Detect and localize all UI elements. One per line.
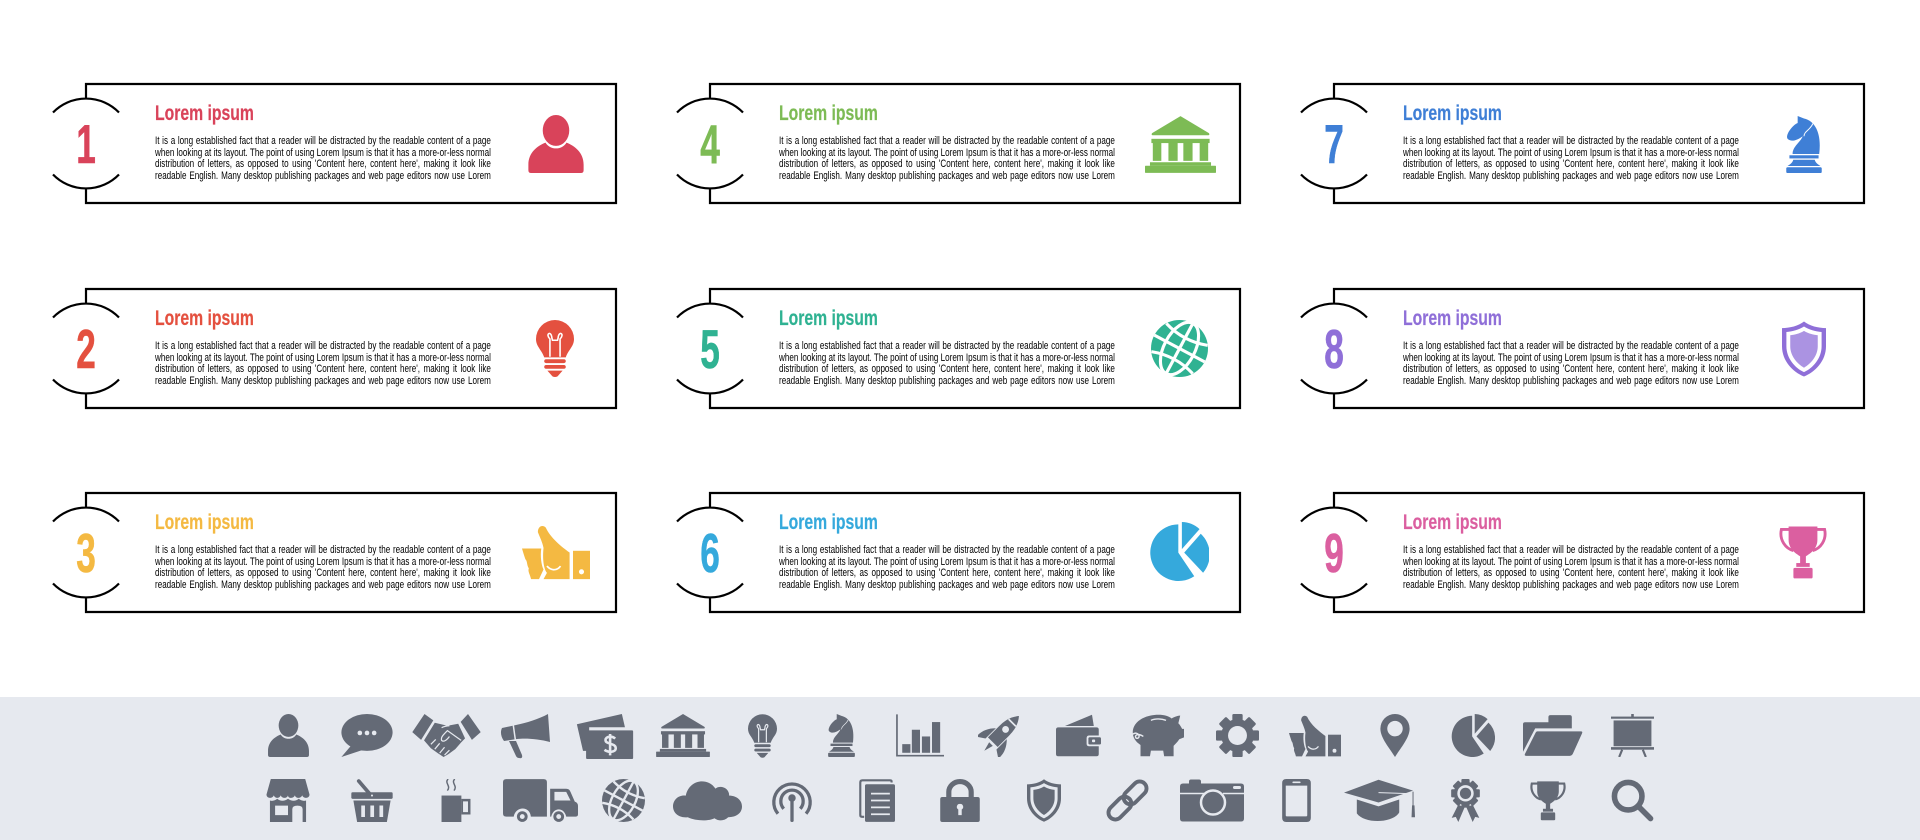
heading: Lorem ipsum: [155, 511, 254, 534]
body text: [779, 544, 1115, 591]
panel: card 4: [676, 82, 1242, 204]
number: 8: [1324, 318, 1344, 380]
frame and arcs: [52, 288, 618, 410]
body text: when looking at its layout. The point of using Lorem Ipsum is that it has a more-or-less normal: [779, 352, 1115, 364]
body text: [155, 135, 491, 182]
heading: Lorem ipsum: [155, 307, 254, 330]
icon: chess knight: [1786, 116, 1822, 173]
panel: card 1: [52, 82, 618, 204]
icon: mug: [441, 779, 471, 822]
panel: card 3: [52, 492, 618, 614]
body text: distribution of letters, as opposed to using 'Content here, content here', making it look like: [1403, 567, 1739, 579]
panel: card 6: [676, 492, 1242, 614]
icon: bar chart: [896, 714, 944, 757]
number: 3: [76, 522, 96, 584]
icon: light bulb: [536, 320, 574, 377]
panel: card 5: [676, 288, 1242, 410]
frame and arcs: [1300, 492, 1866, 614]
icon: magnifying glass: [1611, 779, 1654, 822]
icon: thumbs up: [522, 526, 590, 580]
body text: distribution of letters, as opposed to using 'Content here, content here', making it look like: [779, 567, 1115, 579]
body text: when looking at its layout. The point of using Lorem Ipsum is that it has a more-or-less normal: [779, 147, 1115, 159]
frame and arcs: [52, 492, 618, 614]
icon: rocket: [978, 714, 1021, 757]
body text: readable English. Many desktop publishing packages and web page editors now use Lorem: [1403, 170, 1739, 182]
body text: when looking at its layout. The point of using Lorem Ipsum is that it has a more-or-less normal: [155, 556, 491, 568]
body text: readable English. Many desktop publishing packages and web page editors now use Lorem: [1403, 579, 1739, 591]
icon: light bulb: [748, 714, 777, 758]
icon: chat: [341, 714, 393, 757]
icon: cloud: [673, 779, 742, 822]
body text: when looking at its layout. The point of using Lorem Ipsum is that it has a more-or-less normal: [1403, 352, 1739, 364]
frame and arcs: [676, 288, 1242, 410]
body text: distribution of letters, as opposed to using 'Content here, content here', making it look like: [155, 158, 491, 170]
icon: basket: [351, 779, 393, 822]
body text: distribution of letters, as opposed to using 'Content here, content here', making it look like: [1403, 363, 1739, 375]
icon: person: [268, 714, 309, 757]
body text: [155, 544, 491, 591]
number: 5: [700, 318, 720, 380]
frame and arcs: [1300, 82, 1866, 204]
icon: truck: [503, 779, 578, 822]
number: 7: [1324, 113, 1344, 175]
icon: wallet: [1056, 714, 1101, 757]
panel: card 8: [1300, 288, 1866, 410]
icon: camera: [1180, 779, 1244, 822]
heading: Lorem ipsum: [1403, 307, 1502, 330]
panel: card 7: [1300, 82, 1866, 204]
icon: money: [576, 714, 634, 759]
body text: It is a long established fact that a reader will be distracted by the readable content of a page: [779, 135, 1115, 147]
body text: distribution of letters, as opposed to using 'Content here, content here', making it look like: [779, 158, 1115, 170]
icon: award ribbon: [1451, 779, 1480, 822]
body text: readable English. Many desktop publishing packages and web page editors now use Lorem: [1403, 375, 1739, 387]
body text: It is a long established fact that a reader will be distracted by the readable content of a page: [155, 135, 491, 147]
icon: folder: [1523, 714, 1583, 757]
icon: trophy: [1779, 526, 1827, 578]
body text: when looking at its layout. The point of using Lorem Ipsum is that it has a more-or-less normal: [1403, 147, 1739, 159]
icon: map pin: [1380, 714, 1410, 757]
icon: store: [265, 779, 311, 822]
icon: handshake: [412, 714, 481, 757]
body text: It is a long established fact that a reader will be distracted by the readable content of a page: [155, 340, 491, 352]
icon: padlock: [940, 779, 980, 822]
icon: trophy: [1530, 779, 1566, 822]
body text: readable English. Many desktop publishing packages and web page editors now use Lorem: [779, 579, 1115, 591]
panel: icon band: [0, 697, 1920, 840]
body text: It is a long established fact that a reader will be distracted by the readable content of a page: [155, 544, 491, 556]
frame and arcs: [52, 82, 618, 204]
body text: It is a long established fact that a reader will be distracted by the readable content of a page: [1403, 544, 1739, 556]
body text: readable English. Many desktop publishing packages and web page editors now use Lorem: [779, 170, 1115, 182]
panel: card 9: [1300, 492, 1866, 614]
icon: chess knight: [827, 714, 856, 757]
icon: bank: [1145, 116, 1216, 173]
number: 2: [76, 318, 96, 380]
body text: distribution of letters, as opposed to using 'Content here, content here', making it look like: [155, 363, 491, 375]
body text: [1403, 135, 1739, 182]
heading: Lorem ipsum: [1403, 511, 1502, 534]
icon: signal: [770, 779, 814, 822]
body text: distribution of letters, as opposed to using 'Content here, content here', making it look like: [155, 567, 491, 579]
frame and arcs: [676, 82, 1242, 204]
body text: readable English. Many desktop publishing packages and web page editors now use Lorem: [155, 375, 491, 387]
panel: card 2: [52, 288, 618, 410]
body text: [779, 135, 1115, 182]
number: 9: [1324, 522, 1344, 584]
body text: [1403, 544, 1739, 591]
icon: globe: [602, 779, 645, 822]
body text: [155, 340, 491, 387]
body text: [779, 340, 1115, 387]
body text: distribution of letters, as opposed to using 'Content here, content here', making it look like: [1403, 158, 1739, 170]
heading: Lorem ipsum: [779, 102, 878, 125]
icon: globe: [1151, 320, 1208, 377]
icon: thumbs up: [1289, 714, 1341, 758]
body text: readable English. Many desktop publishing packages and web page editors now use Lorem: [779, 375, 1115, 387]
body text: when looking at its layout. The point of using Lorem Ipsum is that it has a more-or-less normal: [779, 556, 1115, 568]
body text: It is a long established fact that a reader will be distracted by the readable content of a page: [779, 340, 1115, 352]
icon: shield: [1027, 779, 1061, 822]
number: 6: [700, 522, 720, 584]
icon: smartphone: [1282, 779, 1311, 822]
heading: Lorem ipsum: [1403, 102, 1502, 125]
heading: Lorem ipsum: [155, 102, 254, 125]
body text: readable English. Many desktop publishing packages and web page editors now use Lorem: [155, 579, 491, 591]
body text: [1403, 340, 1739, 387]
icon: piggy bank: [1132, 714, 1184, 757]
number: 1: [76, 113, 96, 175]
icon: graduation cap: [1344, 779, 1415, 822]
heading: Lorem ipsum: [779, 511, 878, 534]
icon: pie chart: [1451, 714, 1495, 757]
icon: shield: [1782, 322, 1826, 376]
icon: pie chart: [1150, 522, 1209, 581]
body text: when looking at its layout. The point of using Lorem Ipsum is that it has a more-or-less normal: [155, 352, 491, 364]
body text: It is a long established fact that a reader will be distracted by the readable content of a page: [1403, 135, 1739, 147]
icon: documents: [859, 779, 895, 822]
icon: person: [528, 115, 584, 173]
icon: bank: [656, 714, 710, 757]
icon: presentation board: [1611, 714, 1654, 757]
number: 4: [700, 113, 720, 175]
icon: gear: [1216, 714, 1259, 757]
icon: chain link: [1106, 779, 1149, 822]
body text: It is a long established fact that a reader will be distracted by the readable content of a page: [1403, 340, 1739, 352]
body text: readable English. Many desktop publishing packages and web page editors now use Lorem: [155, 170, 491, 182]
frame and arcs: [1300, 288, 1866, 410]
body text: It is a long established fact that a reader will be distracted by the readable content of a page: [779, 544, 1115, 556]
icon: megaphone: [500, 714, 550, 758]
body text: when looking at its layout. The point of using Lorem Ipsum is that it has a more-or-less normal: [155, 147, 491, 159]
body text: distribution of letters, as opposed to using 'Content here, content here', making it look like: [779, 363, 1115, 375]
body text: when looking at its layout. The point of using Lorem Ipsum is that it has a more-or-less normal: [1403, 556, 1739, 568]
frame and arcs: [676, 492, 1242, 614]
heading: Lorem ipsum: [779, 307, 878, 330]
